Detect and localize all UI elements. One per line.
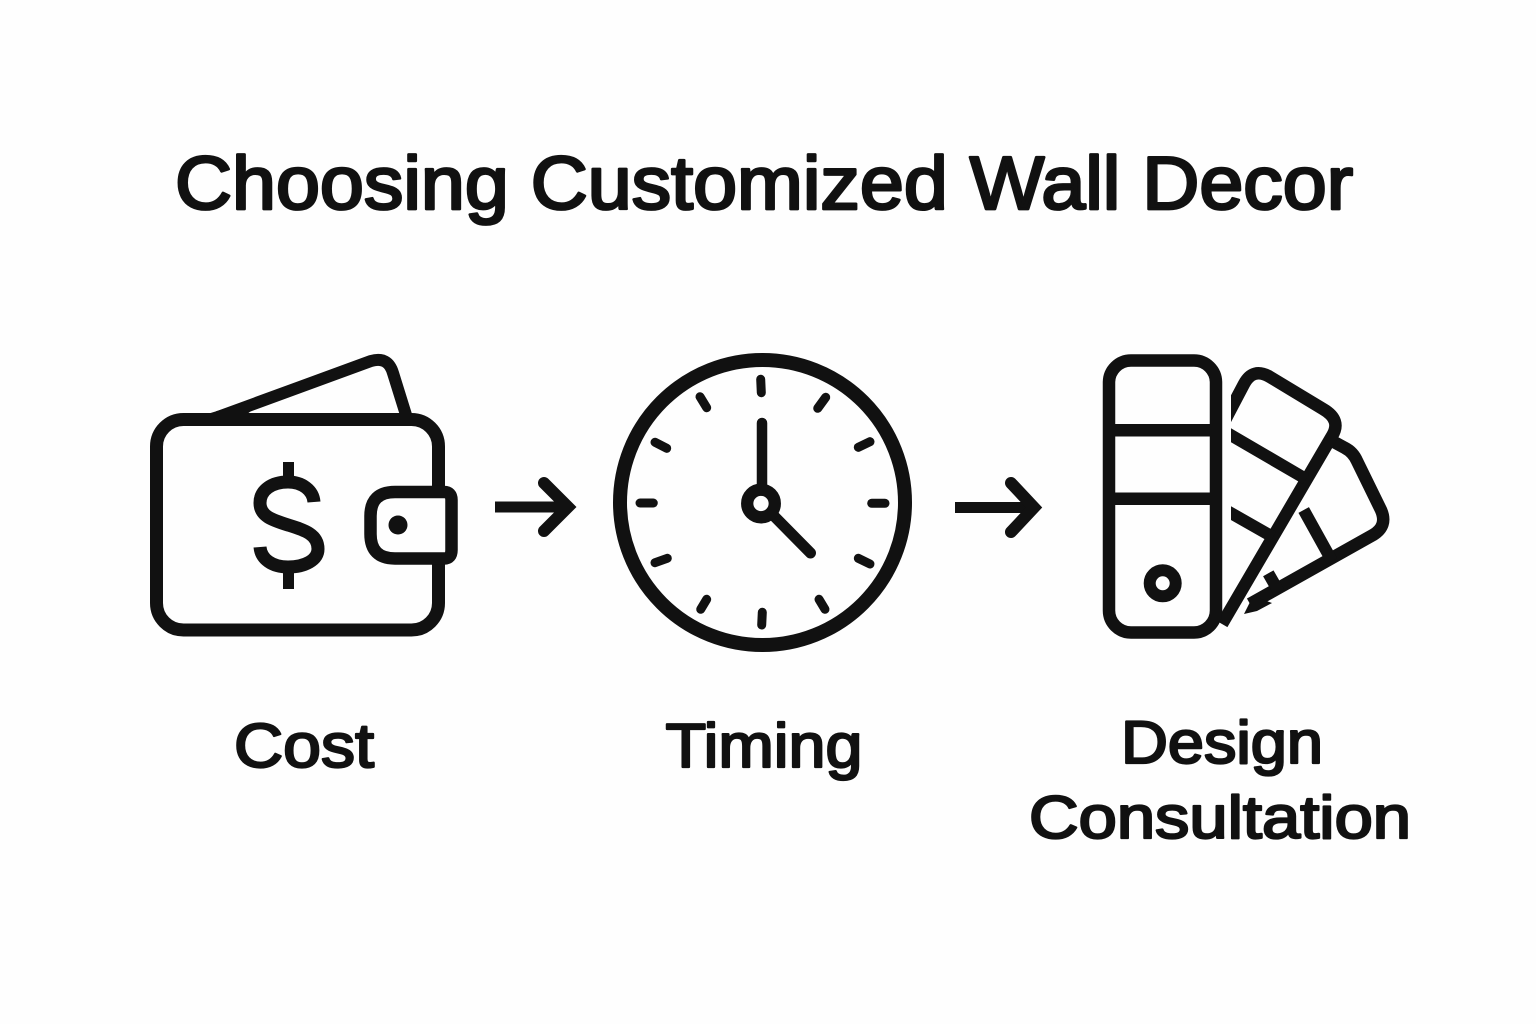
icon: colour swatches [1109, 360, 1383, 632]
label: Design Consultation [1029, 709, 1411, 851]
minute hand [757, 423, 767, 490]
back swatch [1244, 442, 1383, 614]
wallet card [204, 360, 407, 418]
clock hub [747, 490, 775, 517]
front swatch [1109, 360, 1216, 632]
hour hand [772, 514, 810, 553]
icon: wallet [156, 360, 452, 630]
clasp button [388, 516, 408, 534]
wallet clasp [370, 492, 452, 558]
middle swatch [1222, 373, 1335, 624]
wallet body [156, 420, 438, 630]
label: Design Consultation: Design [1121, 709, 1323, 776]
label: Cost: Cost [234, 712, 374, 781]
clock face [620, 360, 905, 645]
arrow: timing to design [955, 483, 1034, 532]
icon: clock [620, 360, 905, 645]
label: Design Consultation: Consultation [1029, 784, 1411, 851]
label: Timing: Timing [666, 712, 862, 781]
dollar sign [260, 462, 318, 589]
title: Choosing Customized Wall Decor [175, 141, 1353, 225]
arrow: cost to timing [495, 483, 568, 531]
hour ticks [640, 379, 885, 625]
